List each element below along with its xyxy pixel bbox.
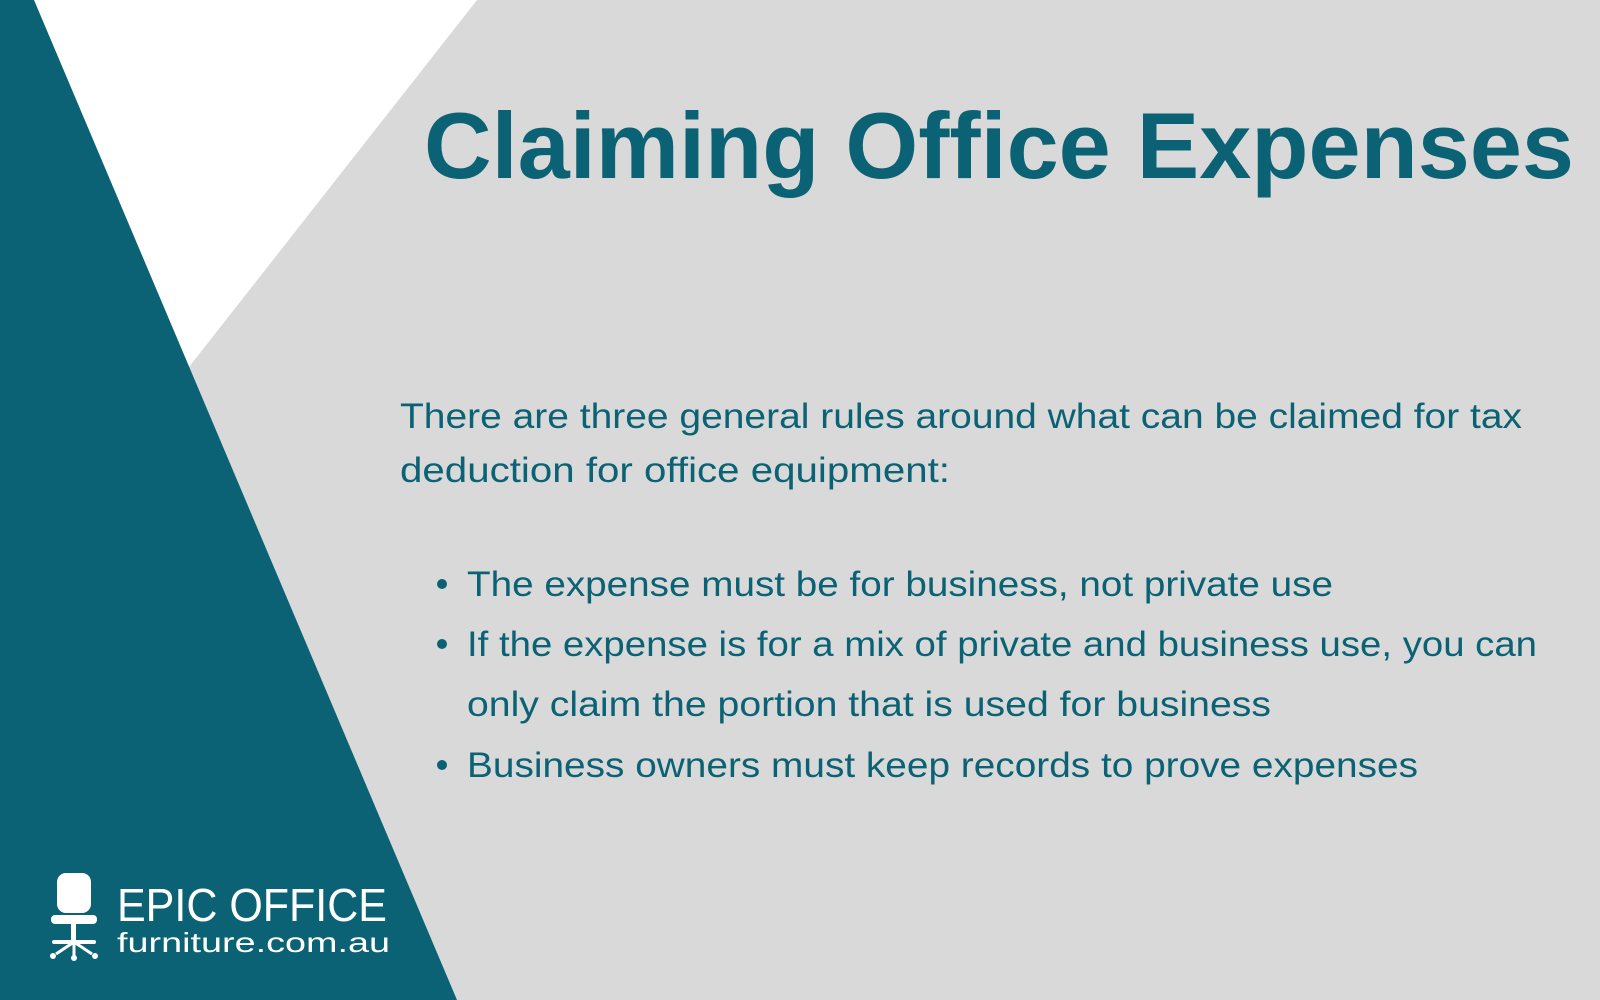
- title: Claiming Office Expenses: [424, 93, 1574, 198]
- intro text: deduction for office equipment:: [400, 451, 950, 490]
- logo wordmark: EPIC OFFICE: [117, 879, 387, 931]
- bullet list: If the expense is for a mix of private and business use, you can: [467, 625, 1537, 664]
- white background triangle: [0, 0, 477, 367]
- bullet list: only claim the portion that is used for business: [467, 685, 1271, 724]
- bullet list: [437, 565, 1537, 785]
- intro text: [400, 397, 1523, 490]
- logo url: furniture.com.au: [117, 927, 390, 958]
- intro text: There are three general rules around what can be claimed for tax: [400, 397, 1523, 436]
- teal diagonal panel: [0, 0, 457, 1000]
- bullet list: The expense must be for business, not private use: [467, 565, 1333, 604]
- logo: [50, 873, 390, 961]
- icon: office chair: [50, 873, 98, 961]
- bullet list: Business owners must keep records to prove expenses: [467, 746, 1418, 785]
